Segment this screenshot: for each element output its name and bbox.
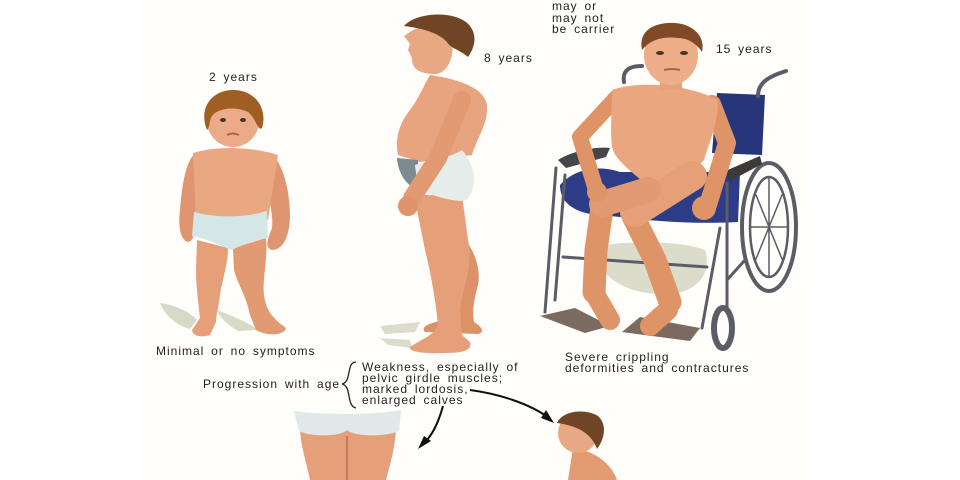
skin limbs and torso bbox=[580, 98, 727, 326]
figure: lower left, legs bbox=[294, 410, 401, 480]
label: 15 years: 15 years bbox=[716, 42, 773, 56]
arrow: to lower figure left bbox=[418, 406, 443, 449]
text: weakness description bbox=[362, 360, 519, 407]
label: 8 years: 8 years bbox=[484, 51, 533, 65]
caption: severe crippling deformities and contractures: deformities and contractures bbox=[565, 361, 749, 375]
figure: lower right, child head and shoulders bbox=[557, 412, 617, 480]
figure: 8 years, standing side view bbox=[380, 14, 487, 353]
label: progression with age: Progression with age bbox=[203, 377, 340, 391]
text: weakness description: Weakness, especially of bbox=[362, 360, 519, 374]
text: weakness description: marked lordosis, bbox=[362, 382, 469, 396]
caption: severe crippling deformities and contractures: Severe crippling bbox=[565, 350, 670, 364]
text: may or may not be carrier: be carrier bbox=[552, 22, 615, 36]
icon: wheelchair bbox=[540, 66, 796, 348]
text: weakness description: enlarged calves bbox=[362, 393, 464, 407]
label: 2 years: 2 years bbox=[209, 70, 258, 84]
text: may or may not be carrier: may not bbox=[552, 11, 604, 25]
figure: 2 years, standing front view bbox=[160, 90, 290, 336]
text: weakness description: pelvic girdle muscles; bbox=[362, 371, 503, 385]
text: may or may not be carrier bbox=[552, 0, 615, 36]
brace bbox=[342, 362, 356, 408]
caption: minimal or no symptoms: Minimal or no symptoms bbox=[156, 344, 316, 358]
caption: severe crippling deformities and contractures bbox=[565, 350, 749, 375]
arrow: to lower figure right bbox=[470, 390, 554, 423]
figure: 15 years, seated in wheelchair bbox=[540, 23, 796, 348]
